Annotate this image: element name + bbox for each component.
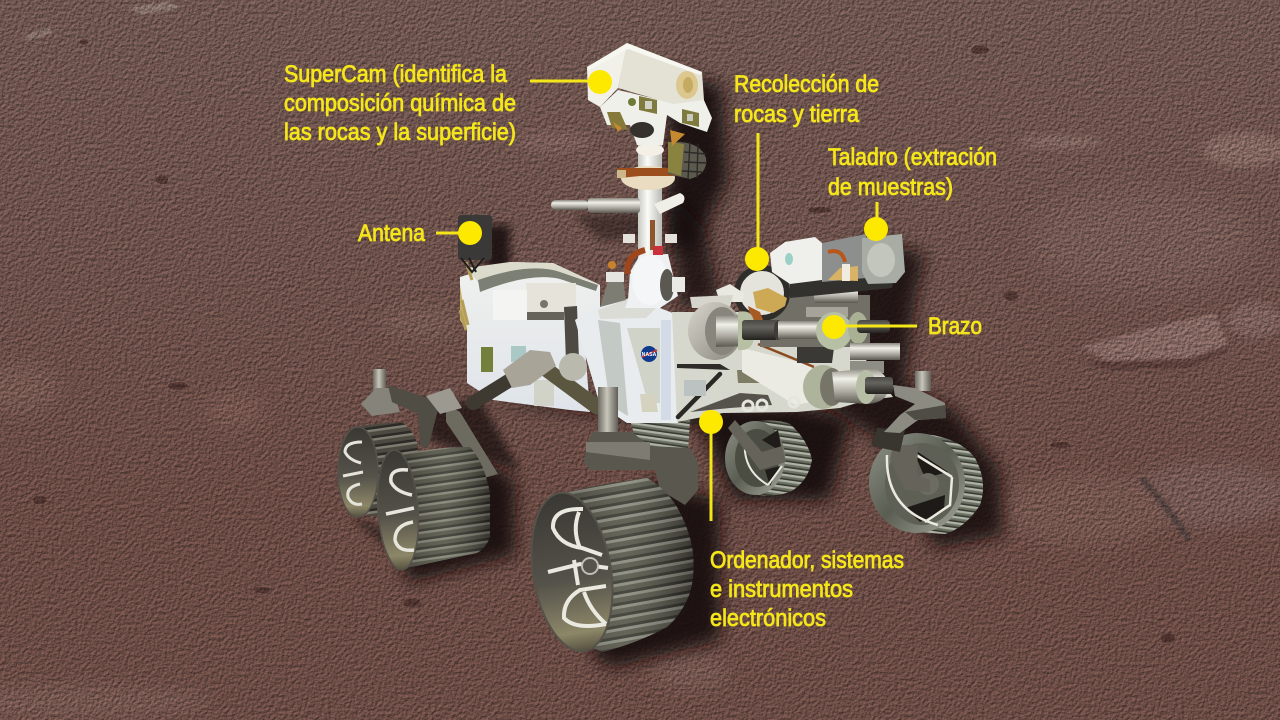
label: Ordenador: e instrumentos	[710, 576, 853, 603]
label: Ordenador	[699, 410, 904, 632]
label: SuperCam: las rocas y la superficie)	[284, 119, 516, 146]
label: SuperCam	[284, 61, 612, 146]
SuperCam head	[587, 43, 712, 146]
main body: left module	[460, 262, 600, 412]
main body: centre panel	[575, 297, 678, 423]
label: Brazo: Brazo	[928, 313, 982, 340]
label: Taladro	[828, 144, 997, 241]
label: Ordenador: Ordenador, sistemas	[710, 547, 904, 574]
label: SuperCam: composición química de	[284, 90, 516, 117]
label: Antena: Antena	[358, 220, 426, 247]
mast	[600, 145, 685, 308]
label: Recolección de rocas y tierra	[734, 71, 879, 271]
label: Ordenador: electrónicos	[710, 605, 826, 632]
mast collar	[617, 144, 680, 190]
right-front wheel	[869, 428, 983, 534]
antenna	[458, 215, 492, 272]
drill turret	[770, 234, 905, 298]
middle wheel behind body	[630, 420, 690, 455]
label: Brazo	[822, 313, 982, 340]
rear-left wheel	[338, 423, 420, 517]
front-left suspension rocker	[473, 350, 698, 505]
rover drop shadow	[350, 70, 1003, 668]
lower arm section	[803, 361, 893, 409]
right-front suspension	[884, 371, 946, 433]
rover	[338, 43, 983, 657]
sample collection ring and gold blanket	[690, 268, 870, 347]
right-rear wheel	[725, 420, 812, 496]
label: SuperCam: SuperCam (identifica la	[284, 61, 508, 88]
main body: right section under arm	[672, 312, 893, 422]
label: Recolección de rocas y tierra: rocas y tierra	[734, 101, 860, 128]
front-left wheel	[374, 447, 490, 571]
mast horizontal antenna	[551, 193, 684, 214]
front-left large wheel	[521, 478, 694, 657]
robotic arm shoulder	[688, 302, 900, 360]
label: Taladro: de muestras)	[828, 174, 953, 201]
camera drum	[668, 142, 707, 179]
label: Recolección de rocas y tierra: Recolección de	[734, 71, 879, 98]
label: Antena	[358, 220, 482, 247]
NASA logo: NASA	[642, 352, 657, 358]
rear suspension	[361, 369, 498, 478]
label: Taladro: Taladro (extración	[828, 144, 997, 171]
